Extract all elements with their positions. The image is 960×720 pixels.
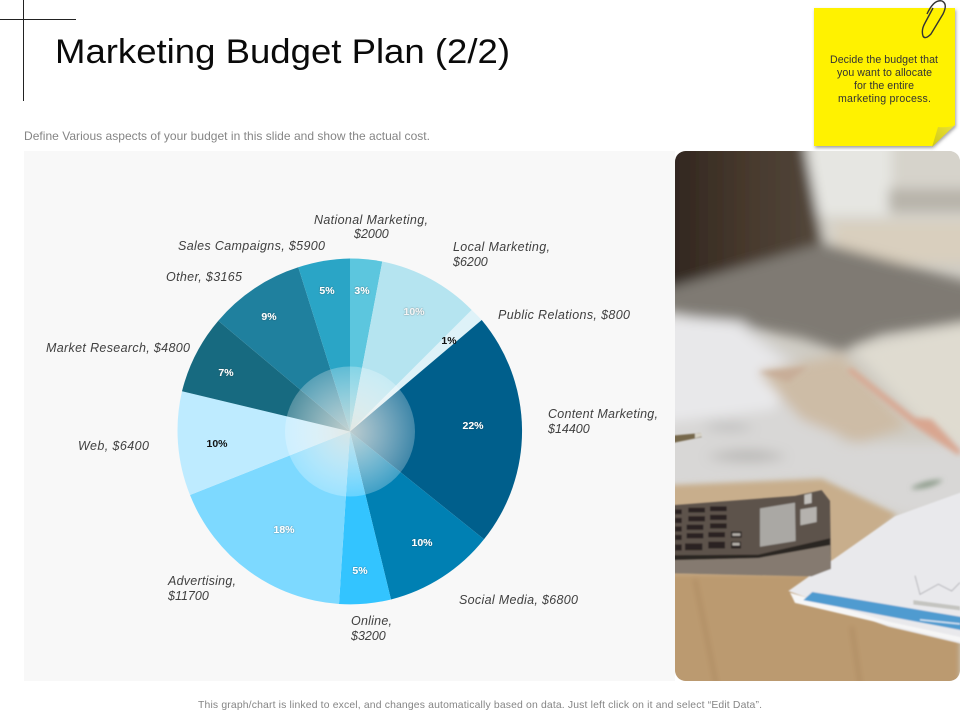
category labels: Public Relations, $800 <box>498 308 630 322</box>
percentage labels: 1% <box>441 335 457 347</box>
category labels: Web, $6400 <box>78 439 149 453</box>
slice: content marketing <box>350 320 522 539</box>
slice: local marketing <box>350 262 472 432</box>
category labels: National Marketing, <box>314 213 428 227</box>
sticky note text <box>830 54 938 105</box>
category labels: $14400 <box>547 422 590 436</box>
category labels <box>46 213 658 643</box>
slice: national marketing <box>350 258 382 432</box>
category labels: Local Marketing, <box>453 240 550 254</box>
percentage labels: 7% <box>218 367 234 379</box>
category labels: Sales Campaigns, $5900 <box>178 239 325 253</box>
percentage labels: 10% <box>206 438 228 450</box>
sticky note text: marketing process. <box>838 93 931 105</box>
category labels: $11700 <box>167 589 209 603</box>
category labels: Other, $3165 <box>166 270 242 284</box>
sticky note text: for the entire <box>854 80 914 92</box>
pie centre highlight <box>285 366 415 496</box>
slice: market research <box>182 321 350 432</box>
category labels: Advertising, <box>167 574 236 588</box>
slice: other <box>218 267 350 432</box>
calculator <box>662 490 831 576</box>
percentage labels: 5% <box>319 285 335 297</box>
slice: social media <box>350 432 484 600</box>
category labels: $3200 <box>350 629 386 643</box>
slice: online <box>339 432 391 604</box>
percentage labels <box>206 285 484 577</box>
icon: paperclip <box>922 1 945 38</box>
slice: public relations <box>350 310 482 432</box>
category labels: Market Research, $4800 <box>46 341 190 355</box>
panel: chart background <box>24 151 675 681</box>
subtitle: Define Various aspects of your budget in this slide and show the actual cost. <box>24 129 430 143</box>
percentage labels: 18% <box>273 524 295 536</box>
percentage labels: 22% <box>462 420 484 432</box>
footer note: This graph/chart is linked to excel, and changes automatically based on data. Just left click on it and select “Edit Data”. <box>198 700 762 711</box>
corner crosshair lines <box>0 0 76 101</box>
sticky note callout <box>814 1 955 147</box>
title: Marketing Budget Plan (2/2) <box>55 33 510 71</box>
percentage labels: 9% <box>261 311 277 323</box>
percentage labels: 3% <box>354 285 370 297</box>
pen <box>672 433 702 443</box>
sticky note fold <box>932 125 955 147</box>
category labels: $2000 <box>353 227 389 241</box>
sticky note paper <box>814 8 955 146</box>
category labels: Online, <box>351 614 392 628</box>
pie chart <box>178 258 522 604</box>
slice: advertising <box>190 432 350 604</box>
bottom paper <box>788 487 960 647</box>
percentage labels: 10% <box>411 537 433 549</box>
category labels: Content Marketing, <box>548 407 658 421</box>
percentage labels: 5% <box>352 565 368 577</box>
category labels: Social Media, $6800 <box>459 593 578 607</box>
sticky note text: Decide the budget that <box>830 54 938 66</box>
percentage labels: 10% <box>403 306 425 318</box>
category labels: $6200 <box>452 255 488 269</box>
photo: desk with calculator and papers <box>675 151 960 681</box>
slice: web <box>178 391 350 495</box>
sticky note text: you want to allocate <box>837 67 932 79</box>
slice: sales campaigns <box>298 258 350 432</box>
